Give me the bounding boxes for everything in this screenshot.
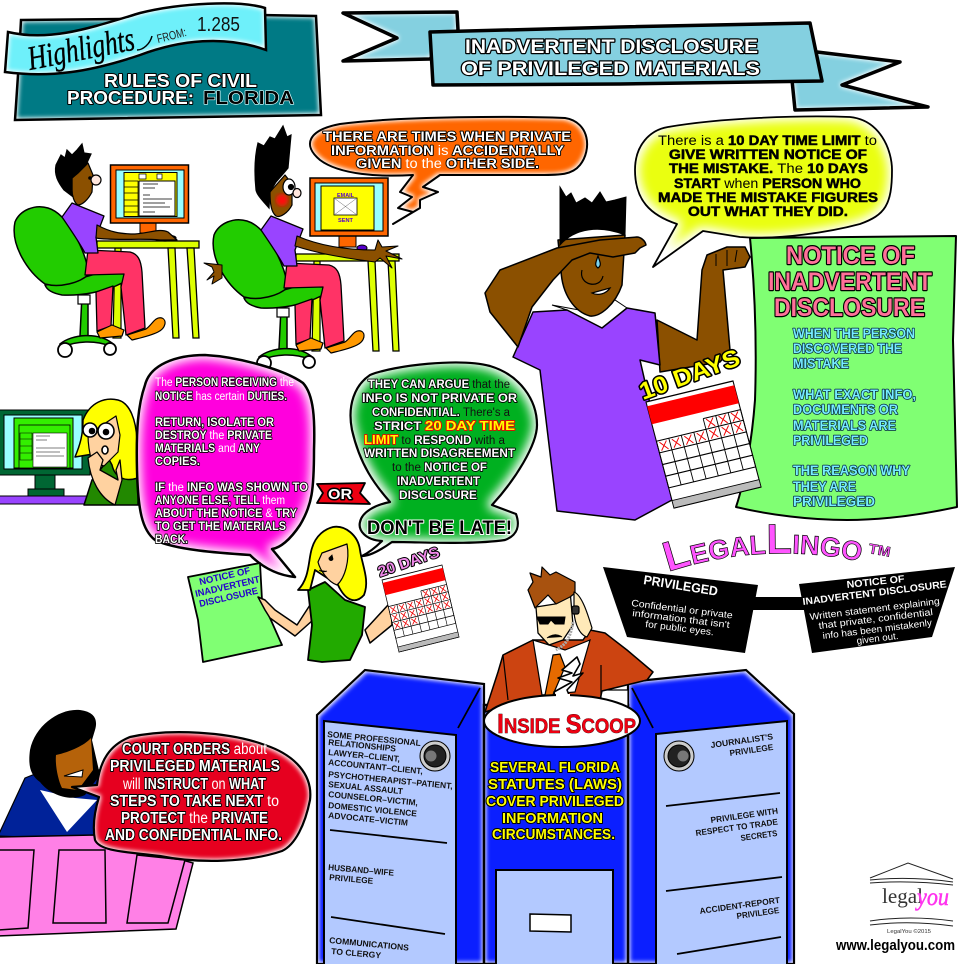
brown hair <box>528 567 575 608</box>
trade secrets privilege text: RESPECT TO TRADE <box>695 816 779 838</box>
chair <box>14 207 126 357</box>
bubble text: to the NOTICE OF <box>392 462 487 474</box>
trade secrets privilege text <box>695 806 779 843</box>
red bubble <box>72 732 310 861</box>
notice items: PRIVILEGED <box>793 433 868 448</box>
term: notice of inadvertent disclosure: NOTICE OF <box>846 574 905 591</box>
term: privileged: for public eyes. <box>645 619 714 638</box>
calendar grid <box>382 565 459 652</box>
drawer <box>496 870 613 964</box>
trademark: TM <box>867 540 892 560</box>
bubble text: will INSTRUCT on WHAT <box>122 776 266 793</box>
bubble text: PRIVILEGED MATERIALS <box>110 758 280 775</box>
monitor showing sent email <box>310 178 388 251</box>
shirt <box>62 203 104 253</box>
bubble text <box>155 377 308 546</box>
term: notice of inadvertent disclosure <box>799 567 955 653</box>
journalist privilege text <box>710 731 774 758</box>
notice heading: NOTICE OF <box>786 242 915 270</box>
bubble text: WRITTEN DISAGREEMENT <box>364 448 515 460</box>
notice heading: INADVERTENT <box>768 268 932 296</box>
bubble text: IF the INFO WAS SHOWN TO <box>155 482 308 494</box>
drawer handle <box>530 914 571 932</box>
journalist privilege text: JOURNALIST'S <box>710 731 774 750</box>
bubble text: CONFIDENTIAL. There's a <box>372 407 511 419</box>
paper text: DISCLOSURE <box>198 586 259 610</box>
illustration: woman at pink podium <box>0 710 193 936</box>
callout: receiving party duties <box>137 355 314 577</box>
professional relationships text: SOME PROFESSIONAL <box>327 729 421 748</box>
term: notice of inadvertent disclosure: given out. <box>856 631 899 647</box>
computer monitor <box>110 165 188 233</box>
email sent labels: SENT <box>338 218 354 224</box>
professional relationships text: PSYCHOTHERAPIST–PATIENT, <box>328 769 453 791</box>
bubble text: INFORMATION is ACCIDENTALLY <box>331 143 564 158</box>
heading: legal lingo <box>662 524 892 572</box>
desk <box>296 254 399 351</box>
email sent labels: EMAIL <box>337 193 355 199</box>
bubble text: INFO IS NOT PRIVATE OR <box>362 393 518 405</box>
panel: highlights header <box>5 3 321 120</box>
bubble text: START when PERSON WHO <box>674 176 861 191</box>
mouth <box>64 770 83 777</box>
cabinet front panel <box>656 721 787 964</box>
green paper <box>736 236 957 520</box>
bubble text <box>105 741 282 844</box>
roof <box>870 863 953 926</box>
divider lines <box>330 830 447 934</box>
illustration: man who sent the email <box>204 126 402 370</box>
purple desk <box>0 496 90 504</box>
paper text <box>194 565 261 610</box>
left hand <box>204 263 222 284</box>
banner main panel <box>430 23 822 85</box>
callout: court orders <box>72 732 310 861</box>
divider lines <box>666 793 782 954</box>
professional relationships text: ACCOUNTANT–CLIENT, <box>328 757 423 776</box>
face <box>56 738 93 790</box>
inside scoop body text: COVER PRIVILEGED <box>486 794 624 810</box>
head <box>558 235 625 316</box>
highlights ribbon <box>5 3 266 74</box>
arms <box>258 597 392 643</box>
paper text: INADVERTENT <box>194 574 261 600</box>
professional relationships text: RELATIONSHIPS <box>328 737 397 754</box>
10 days label: 10 DAYS <box>636 344 744 406</box>
bubble text: The PERSON RECEIVING the <box>155 377 294 389</box>
term: notice of inadvertent disclosure: that private, confidential <box>818 607 934 632</box>
bubble text: MATERIALS and ANY <box>155 443 260 455</box>
term: notice of inadvertent disclosure: INADVERTENT DISCLOSURE <box>802 579 948 608</box>
orange-red jacket <box>485 630 653 712</box>
cabinet body <box>628 670 794 964</box>
bubble text: THE MISTAKE. The 10 DAYS <box>669 161 868 176</box>
head and hair <box>55 144 101 205</box>
combination dial <box>420 741 450 771</box>
term: privileged: Confidential or private <box>631 598 733 621</box>
illustration: man at computer <box>14 144 199 357</box>
copyright: LegalYou ©2015 <box>887 928 931 935</box>
inside scoop body text: INFORMATION <box>502 811 603 827</box>
monitor <box>0 410 90 496</box>
clergy privilege text: TO CLERGY <box>331 946 382 960</box>
callout: inside scoop badge <box>484 657 640 747</box>
term: notice of inadvertent disclosure: info has been mistakenly <box>822 618 933 642</box>
20 days label: 20 DAYS <box>376 544 442 581</box>
rules heading <box>67 71 294 108</box>
trousers and shoes <box>85 250 165 340</box>
highlights script wordmark: Highlights <box>24 21 138 78</box>
white shirt backing <box>600 690 628 712</box>
bubble text: THERE ARE TIMES WHEN PRIVATE <box>323 129 571 144</box>
professional relationships text: ADVOCATE–VICTIM <box>328 810 408 828</box>
tear, nose and mouth <box>582 256 610 294</box>
bubble text: COPIES. <box>155 456 200 468</box>
callout: accidental disclosure <box>310 117 587 224</box>
legal lingo wordmark: LEGALLINGO <box>662 524 862 572</box>
panel: notice of inadvertent disclosure <box>736 236 957 520</box>
connector bar <box>750 597 805 610</box>
notice items: MATERIALS ARE <box>793 418 896 433</box>
bubble text: COURT ORDERS about <box>122 741 268 758</box>
notice items: PRIVILEGED <box>793 494 875 509</box>
professional relationships text <box>327 729 453 828</box>
banner tails <box>343 12 928 110</box>
centre filing cabinet <box>484 705 628 964</box>
yellow bubble <box>635 116 892 267</box>
hand and arm <box>88 452 122 505</box>
bubble text <box>323 129 571 171</box>
bubble text: AND CONFIDENTIAL INFO. <box>105 827 282 844</box>
husband-wife privilege text: HUSBAND–WIFE <box>328 862 395 878</box>
notice items: THE REASON WHY <box>793 463 910 478</box>
journalist privilege text: PRIVILEGE <box>729 742 774 758</box>
bubble text: BACK. <box>155 534 188 546</box>
notice items <box>793 326 916 509</box>
title text <box>461 36 760 80</box>
desk <box>97 241 199 338</box>
term: notice of inadvertent disclosure: Written statement explaining <box>809 596 940 623</box>
hand, phone and coiled cord <box>556 592 592 650</box>
green bubble <box>351 363 537 556</box>
calendar: 10 days <box>636 344 761 508</box>
purple shirt <box>513 308 672 520</box>
inside scoop body text: STATUTES (LAWS) <box>488 777 622 793</box>
eye and mouth <box>319 555 333 572</box>
magenta bubble <box>137 355 314 577</box>
tail join <box>556 694 570 700</box>
lightning tail <box>554 657 583 702</box>
bubble text <box>658 133 878 219</box>
illustration: lawyer on phone <box>485 567 653 712</box>
red ribbon shape <box>317 483 370 504</box>
paper text: NOTICE OF <box>198 565 252 588</box>
clergy privilege text: COMMUNICATIONS <box>329 935 410 953</box>
bubble text: ANYONE ELSE, TELL them <box>155 495 285 507</box>
rules heading: PROCEDURE: <box>67 88 194 108</box>
calendar: 20 days <box>376 544 459 652</box>
yellow hair back <box>75 399 138 479</box>
term: privileged <box>603 567 758 653</box>
sunglasses and frown <box>537 617 565 638</box>
bubble text: TO GET THE MATERIALS <box>155 521 286 533</box>
inside scoop wordmark: INSIDE SCOOP <box>497 708 636 739</box>
notice items: MISTAKE <box>793 356 849 371</box>
logo: legalyou <box>835 863 955 954</box>
notice items: DISCOVERED THE <box>793 341 902 356</box>
professional relationships text: COUNSELOR–VICTIM, <box>328 789 418 808</box>
left filing cabinet <box>317 670 484 964</box>
husband-wife privilege text: PRIVILEGE <box>329 872 374 886</box>
glossary: legal lingo definitions <box>603 567 955 653</box>
trousers and shoes <box>284 263 364 353</box>
pink podium <box>0 835 193 936</box>
orange bubble <box>310 117 587 224</box>
bubble text: PROTECT the PRIVATE <box>121 810 268 827</box>
inside scoop body text <box>486 760 624 843</box>
illustration: notice paper <box>188 563 282 662</box>
notice items: WHAT EXACT INFO, <box>793 387 916 402</box>
professional relationships text: SEXUAL ASSAULT <box>328 779 404 796</box>
bubble text: STEPS TO TAKE NEXT to <box>110 793 279 810</box>
green paper <box>188 563 282 662</box>
callout: 20 day disagreement <box>351 363 537 556</box>
bubble text: GIVEN to the OTHER SIDE. <box>356 156 539 171</box>
face <box>88 416 120 466</box>
illustration: crying man with hand over eyes <box>485 187 750 520</box>
green dress <box>308 582 365 662</box>
accident report privilege text: PRIVILEGE <box>736 905 780 921</box>
face <box>536 590 573 645</box>
desk back leg <box>113 248 121 338</box>
side edge <box>458 688 480 728</box>
bubble text: INADVERTENT <box>397 476 480 488</box>
right filing cabinet <box>628 670 794 964</box>
legal wordmark: legal <box>882 884 923 908</box>
white bubble <box>484 695 640 747</box>
blue jacket <box>0 770 110 840</box>
don't be late: DON'T BE LATE! <box>367 518 512 539</box>
inside scoop body text: CIRCUMSTANCES. <box>492 827 615 843</box>
cabinet body <box>317 670 484 964</box>
bubble text <box>362 379 518 502</box>
raised right arm and fist <box>657 247 750 372</box>
trade secrets privilege text: PRIVILEGE WITH <box>710 806 779 825</box>
bubble text: RETURN, ISOLATE OR <box>155 417 275 429</box>
spiky hair <box>560 187 626 245</box>
shirt <box>261 216 303 266</box>
shirt and tie <box>503 640 601 700</box>
title banner <box>343 12 928 110</box>
white blouse <box>40 790 97 832</box>
term: privileged: PRIVILEGED <box>643 572 719 599</box>
notice items: DOCUMENTS OR <box>793 402 898 417</box>
notice heading: DISCLOSURE <box>774 294 925 322</box>
bubble text: MADE THE MISTAKE FIGURES <box>658 190 878 205</box>
side edge <box>632 688 653 728</box>
accident report privilege text: ACCIDENT-REPORT <box>699 895 781 916</box>
you wordmark: you <box>914 884 949 911</box>
forearm over eyes <box>485 237 646 347</box>
title text: INADVERTENT DISCLOSURE <box>465 36 758 58</box>
bubble text: DISCLOSURE <box>399 490 477 502</box>
chair <box>213 220 325 370</box>
trade secrets privilege text: SECRETS <box>740 828 778 843</box>
bubble text: STRICT 20 DAY TIME <box>374 418 515 433</box>
white collar backing <box>552 300 627 328</box>
bubble text: LIMIT to RESPOND with a <box>364 432 506 447</box>
illustration: shocked woman at monitor <box>0 399 138 505</box>
teal rules panel <box>15 15 321 120</box>
callout: 10 day time limit <box>635 116 892 267</box>
inside scoop body text: SEVERAL FLORIDA <box>490 760 620 776</box>
bubble text: ABOUT THE NOTICE & TRY <box>155 508 297 520</box>
title text: OF PRIVILEGED MATERIALS <box>461 58 760 80</box>
calendar grid <box>646 381 761 508</box>
from label: FROM: <box>155 25 188 46</box>
clergy privilege text <box>329 935 410 960</box>
wide eyes <box>83 423 114 454</box>
professional relationships text: LAWYER–CLIENT, <box>328 747 400 764</box>
term: privileged: information that isn't <box>632 608 731 631</box>
cabinet front <box>484 705 628 964</box>
or label: OR <box>328 486 352 503</box>
black hair <box>29 710 100 798</box>
head, tall hair and flushed cheek <box>255 126 301 216</box>
bubble text: NOTICE has certain DUTIES. <box>155 391 287 403</box>
arm and mouse <box>96 225 177 241</box>
combination dial <box>664 741 694 771</box>
desk back leg <box>312 261 320 351</box>
professional relationships text: DOMESTIC VIOLENCE <box>328 800 418 819</box>
yellow hair <box>298 527 366 600</box>
bubble text: GIVE WRITTEN NOTICE OF <box>669 147 867 162</box>
notice items: THEY ARE <box>793 479 856 494</box>
cabinet front panel <box>324 721 456 964</box>
notice items: WHEN THE PERSON <box>793 326 915 341</box>
notice heading <box>768 242 932 322</box>
outstretched arm <box>295 236 402 268</box>
bubble text: OUT WHAT THEY DID. <box>688 204 848 219</box>
husband-wife privilege text <box>328 862 395 886</box>
face <box>318 544 348 585</box>
rule number: 1.285 <box>197 14 240 36</box>
bubble text: THEY CAN ARGUE that the <box>368 379 510 391</box>
email sent labels <box>337 193 355 224</box>
illustration: woman reading notice <box>258 527 392 662</box>
ribbon: or <box>317 483 370 504</box>
rules heading: RULES OF CIVIL <box>104 71 257 91</box>
rules heading: FLORIDA <box>203 88 294 108</box>
bubble text: There is a 10 DAY TIME LIMIT to <box>658 133 877 148</box>
bubble text: DESTROY the PRIVATE <box>155 430 272 442</box>
green top <box>84 460 138 505</box>
